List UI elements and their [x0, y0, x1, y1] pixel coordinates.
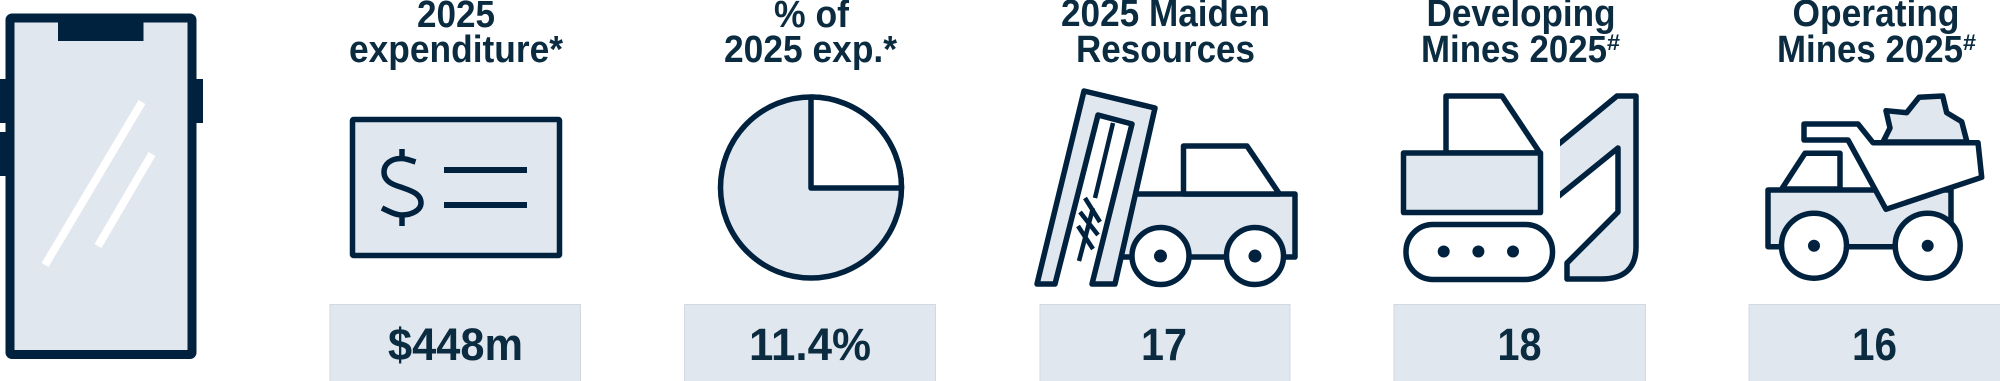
value box: 17 — [1040, 304, 1290, 381]
value box: 18: 18 — [1498, 319, 1542, 370]
heading: Developing Mines 2025#: # — [1607, 30, 1620, 55]
heading: 2025 expenditure — [349, 0, 563, 71]
icon: pie chart — [720, 97, 902, 278]
value box: 18 — [1394, 304, 1646, 381]
value box: 17: 17 — [1141, 319, 1187, 370]
heading: Developing Mines 2025# — [1421, 0, 1620, 71]
value box: $448m — [330, 304, 580, 381]
heading: Developing Mines 2025#: Mines 2025 — [1421, 29, 1607, 71]
value box: 11.4%: 11.4% — [749, 319, 871, 370]
heading: % of 2025 exp. — [724, 0, 897, 71]
value box: 16 — [1749, 304, 2000, 381]
panel: 2025 expenditure — [330, 0, 580, 381]
value box: 11.4% — [684, 304, 936, 381]
heading: 2025 Maiden Resources: Resources — [1076, 29, 1255, 71]
value box: 16: 16 — [1852, 319, 1897, 370]
heading: Operating Mines 2025#: # — [1963, 30, 1976, 55]
panel: 2025 maiden resources — [1037, 0, 1295, 381]
heading: 2025 expenditure: expenditure* — [349, 29, 563, 71]
heading: 2025 Maiden Resources — [1061, 0, 1270, 71]
panel: developing mines 2025 — [1394, 0, 1646, 381]
icon: excavator — [1404, 96, 1636, 280]
panel: operating mines 2025 — [1749, 0, 2000, 381]
icon: banknote with dollar sign — [352, 120, 560, 256]
heading: Operating Mines 2025#: Mines 2025 — [1777, 29, 1963, 71]
icon: smartphone — [0, 18, 203, 354]
heading: Operating Mines 2025# — [1777, 0, 1976, 71]
value box: $448m: $448m — [388, 319, 523, 370]
panel: % of 2025 expenditure — [684, 0, 936, 381]
icon: dump truck — [1768, 96, 1982, 278]
icon: forklift — [1037, 91, 1295, 284]
heading: % of 2025 exp.: 2025 exp.* — [724, 29, 897, 71]
